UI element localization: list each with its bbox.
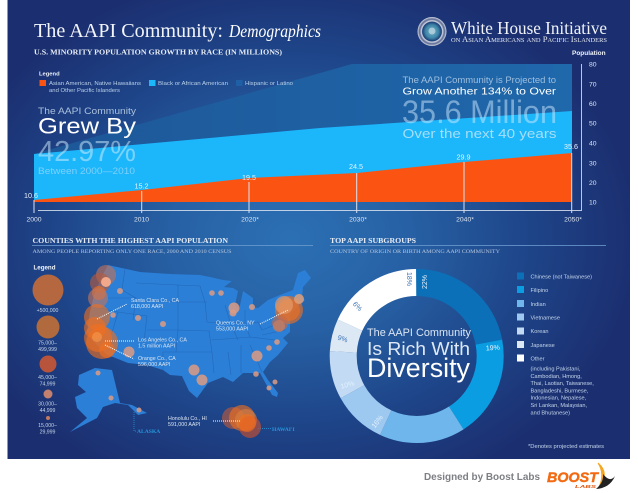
y axis title: Population — [572, 50, 606, 57]
Hawaii connector label: ALASKA — [137, 429, 160, 435]
donut labels: 10% — [340, 380, 355, 391]
map legend: +500,000 — [37, 308, 59, 314]
y axis labels — [589, 62, 597, 206]
donut labels: 19% — [486, 345, 500, 352]
donut legend: Thai, Laotian, Taiwanese, — [530, 381, 594, 387]
donut legend: (including Pakistani, — [530, 366, 581, 372]
data labels: 15.2 — [134, 182, 148, 190]
y axis labels: 60 — [589, 101, 597, 108]
donut legend — [517, 272, 594, 416]
map callouts: Orange Co., CA — [138, 356, 176, 362]
map legend: Legend — [33, 264, 56, 272]
state borders — [94, 269, 285, 375]
chart legend: Asian American, Native Hawaiians — [49, 81, 141, 87]
donut legend: Indonesian, Nepalese, — [530, 396, 587, 402]
map callouts: 553,000 AAPI — [216, 326, 248, 332]
data labels: 19.5 — [242, 173, 256, 182]
Alaska — [70, 368, 147, 432]
logo: Boost Labs: LABS — [575, 484, 597, 490]
map legend: 75,000– — [38, 340, 57, 346]
y axis labels: 40 — [589, 140, 597, 148]
donut chart — [337, 272, 500, 430]
data labels: 35.6 — [564, 142, 578, 151]
data labels: 10.6 — [24, 191, 38, 200]
heading: counties — [32, 237, 313, 255]
map legend: 499,999 — [38, 347, 57, 353]
chart legend: Black or African American — [158, 81, 228, 87]
map callouts: Queens Co., NY — [216, 320, 255, 326]
map callouts: 591,000 AAPI — [168, 422, 200, 428]
title — [34, 20, 321, 42]
donut legend: Bangladeshi, Burmese, — [530, 388, 589, 394]
map legend: 45,000– — [38, 375, 57, 381]
heading: subgroups: TOP AAPI SUBGROUPS — [330, 237, 416, 245]
x axis labels: 2010 — [134, 216, 149, 224]
area: Hispanic or Latino — [34, 64, 572, 160]
data labels — [24, 142, 578, 200]
donut legend: and Bhutanese) — [530, 410, 570, 416]
donut center text: Diversity — [367, 353, 471, 383]
heading: subgroups: COUNTRY OF ORIGIN OR BIRTH AMONG AAPI COMMUNITY — [330, 249, 500, 255]
map callouts: Honolulu Co., HI — [168, 416, 207, 422]
map legend: 74,999 — [40, 382, 56, 388]
donut legend: Cambodian, Hmong, — [530, 374, 582, 380]
logo: Boost Labs — [547, 463, 615, 490]
y axis labels: 70 — [589, 82, 597, 88]
contiguous states — [87, 265, 311, 398]
population bubbles — [84, 265, 304, 438]
x axis labels: 2040* — [456, 216, 474, 224]
y axis labels: 80 — [589, 62, 597, 68]
axis — [34, 64, 582, 213]
chart legend — [39, 72, 293, 94]
donut labels: 6% — [351, 301, 363, 313]
y axis labels: 20 — [589, 180, 597, 187]
callout: grew by — [38, 106, 137, 176]
callout: projected: The AAPI Community is Projected to — [402, 75, 556, 85]
callout: grew by: 42.97% — [38, 136, 136, 168]
callout: projected: Grow Another 134% to Over — [402, 86, 557, 98]
US map — [70, 265, 311, 435]
donut center text — [367, 327, 471, 383]
donut labels: 16% — [371, 414, 385, 430]
callout: grew by: Between 2000—2010 — [38, 166, 135, 176]
y axis labels: 10 — [589, 200, 597, 206]
map legend: 15,000– — [38, 423, 57, 429]
donut legend: Other — [530, 356, 545, 362]
x axis labels: 2000 — [26, 216, 42, 224]
donut legend: Sri Lankan, Malaysian, — [530, 403, 588, 409]
map callouts: Los Angeles Co., CA — [138, 338, 187, 344]
area: Black or African American — [34, 111, 572, 201]
callout: grew by: Grew By — [38, 114, 137, 138]
donut legend: Korean — [530, 329, 549, 335]
donut legend: Vietnamese — [530, 316, 560, 322]
x axis labels: 2050* — [564, 216, 582, 224]
US map: HAWAI'I — [272, 427, 295, 433]
donut labels: 9% — [337, 335, 348, 344]
donut legend: Chinese (not Taiwanese) — [530, 274, 592, 280]
title: The AAPI Community: — [34, 20, 223, 42]
donut labels: 18% — [405, 272, 412, 286]
callout: grew by: The AAPI Community — [38, 106, 136, 117]
map legend: 44,999 — [40, 408, 56, 414]
heading: subgroups — [330, 237, 606, 255]
chart heading: U.S. MINORITY POPULATION GROWTH BY RACE (IN MILLIONS) — [34, 48, 283, 56]
map callouts: 618,000 AAPI — [131, 304, 163, 310]
x axis labels — [26, 216, 582, 224]
y axis labels: 50 — [589, 120, 597, 128]
x axis labels: 2020* — [241, 216, 259, 224]
data labels: 29.9 — [456, 152, 470, 162]
donut legend: Filipino — [530, 288, 548, 294]
callout: projected — [402, 75, 557, 141]
footnote: *Denotes projected estimates — [528, 444, 604, 450]
logo: White House Initiative: on Asian Americans and Pacific Islanders — [451, 35, 607, 44]
map callouts: 1.5 million AAPI — [138, 344, 175, 350]
chart legend: and Other Pacific Islanders — [49, 88, 120, 94]
logo: Boost Labs: BOOST — [547, 470, 600, 485]
chart legend: Legend — [39, 72, 60, 78]
callout: projected: Over the next 40 years — [402, 126, 557, 141]
donut center text: The AAPI Community — [367, 327, 471, 339]
map callouts: Santa Clara Co., CA — [131, 298, 179, 304]
heading: counties: AMONG PEOPLE REPORTING ONLY ONE RACE, 2000 AND 2010 CENSUS — [32, 249, 232, 255]
donut labels — [337, 272, 500, 430]
donut labels: 22% — [422, 275, 429, 289]
title: Demographics — [228, 21, 321, 41]
map legend: 29,999 — [40, 430, 56, 436]
donut center text: Is Rich With — [367, 339, 470, 359]
map legend — [32, 264, 64, 436]
y axis labels: 30 — [589, 160, 597, 168]
map callouts — [97, 298, 288, 428]
logo: White House Initiative: White House Initiative — [451, 18, 607, 38]
chart legend: Hispanic or Latino — [245, 81, 293, 87]
area chart — [24, 50, 606, 224]
heading: counties: COUNTIES WITH THE HIGHEST AAPI POPULATION — [32, 237, 228, 245]
callout: projected: 35.6 Million — [402, 94, 557, 130]
donut legend: Japanese — [530, 343, 555, 349]
data labels: 24.5 — [349, 162, 363, 171]
map callouts: 596,000 AAPI — [138, 362, 170, 368]
footer credit: Designed by Boost Labs — [424, 472, 540, 483]
x axis labels: 2030* — [349, 216, 367, 224]
donut legend: Indian — [530, 302, 546, 308]
map legend: 30,000– — [38, 402, 57, 408]
logo: White House Initiative — [418, 17, 607, 46]
area: AAPI — [34, 153, 572, 202]
